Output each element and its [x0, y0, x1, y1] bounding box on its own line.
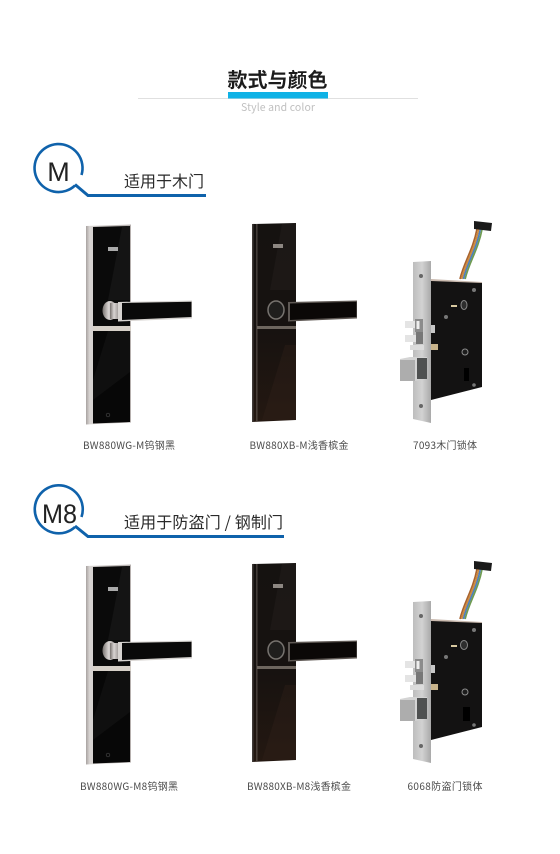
section header: M for wooden doors	[35, 144, 206, 196]
product: 6068 security door mortise	[400, 561, 492, 793]
product: BW880XB-M champagne gold	[250, 223, 357, 452]
heading text: 适用于防盗门 / 钢制门	[124, 509, 283, 533]
mortise lock body illustration	[400, 221, 492, 423]
door handle lock illustration	[86, 224, 192, 424]
subtitle: Style and color	[241, 100, 316, 115]
product: BW880XB-M8 champagne gold	[247, 563, 357, 793]
mortise lock body illustration	[400, 561, 492, 763]
badge: M magnifier outline: M	[47, 157, 70, 187]
caption: BW880XB-M8浅香槟金	[247, 778, 351, 793]
badge: M magnifier outline	[35, 144, 206, 196]
section header: M8 for security and steel doors	[35, 485, 284, 536]
caption: BW880WG-M钨钢黑	[83, 437, 175, 452]
product: BW880WG-M tungsten steel black	[83, 224, 192, 452]
product: 7093 wooden door mortise	[400, 221, 492, 452]
door handle lock illustration	[252, 223, 357, 422]
door handle lock illustration	[252, 563, 357, 762]
caption: BW880WG-M8钨钢黑	[80, 778, 178, 793]
title: 款式与颜色	[228, 64, 328, 93]
heading text: 适用于木门	[124, 168, 204, 192]
caption: BW880XB-M浅香槟金	[250, 437, 348, 452]
product: BW880WG-M8 tungsten steel black	[80, 564, 192, 793]
title underline	[138, 92, 418, 99]
badge: M8 magnifier outline: M8	[42, 499, 77, 529]
badge: M8 magnifier outline	[35, 485, 284, 536]
caption: 7093木门锁体	[413, 437, 477, 452]
caption: 6068防盗门锁体	[408, 778, 482, 793]
door handle lock illustration	[86, 564, 192, 764]
